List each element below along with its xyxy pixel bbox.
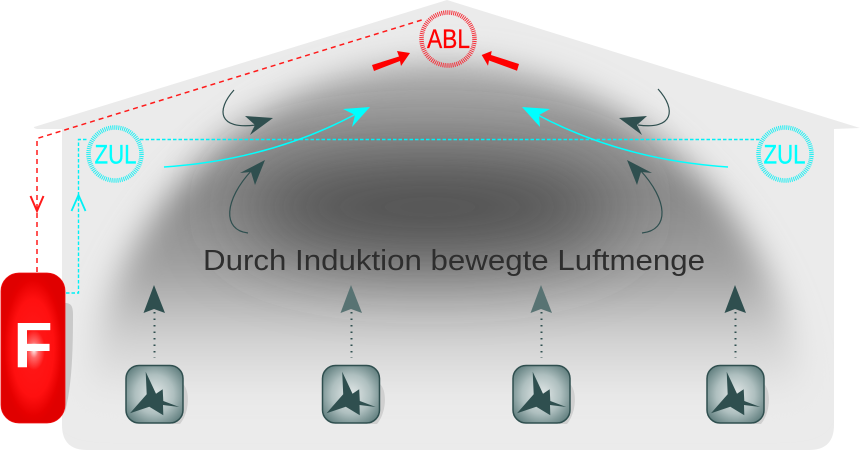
fan unit 3 bbox=[513, 285, 575, 424]
fan unit 4 bbox=[707, 285, 769, 424]
vent: ABL bbox=[422, 12, 474, 66]
supply duct: cyan dashed line bbox=[66, 140, 760, 293]
chart: induced air mass shading bbox=[88, 62, 802, 405]
arrow: induction lower left bbox=[230, 160, 265, 233]
vent: ZUL left bbox=[88, 128, 142, 180]
label: induction air mass: Durch Induktion bewegte Luftmenge bbox=[203, 245, 705, 277]
fan unit 1 bbox=[126, 285, 188, 424]
arrow: red exhaust right bbox=[482, 51, 519, 71]
filter unit F: F bbox=[13, 309, 53, 381]
vent: ZUL right bbox=[758, 128, 812, 180]
fan unit 2 bbox=[322, 285, 385, 424]
vent: ZUL left: ZUL bbox=[94, 140, 136, 170]
arrow: supply flow chevron bbox=[72, 195, 86, 211]
arrow: induction upper right bbox=[619, 89, 669, 135]
arrow: red exhaust left bbox=[372, 51, 410, 71]
arrow: cyan supply left bbox=[164, 107, 370, 167]
arrow: induction lower right bbox=[627, 160, 662, 233]
filter unit F bbox=[1, 273, 73, 423]
arrow: cyan supply right bbox=[522, 107, 728, 167]
arrow: induction upper left bbox=[223, 90, 273, 135]
arrow: exhaust flow chevron bbox=[30, 196, 44, 211]
vent: ABL: ABL bbox=[427, 24, 470, 54]
exhaust duct: red dashed line bbox=[30, 19, 425, 272]
vent: ZUL right: ZUL bbox=[764, 140, 806, 170]
